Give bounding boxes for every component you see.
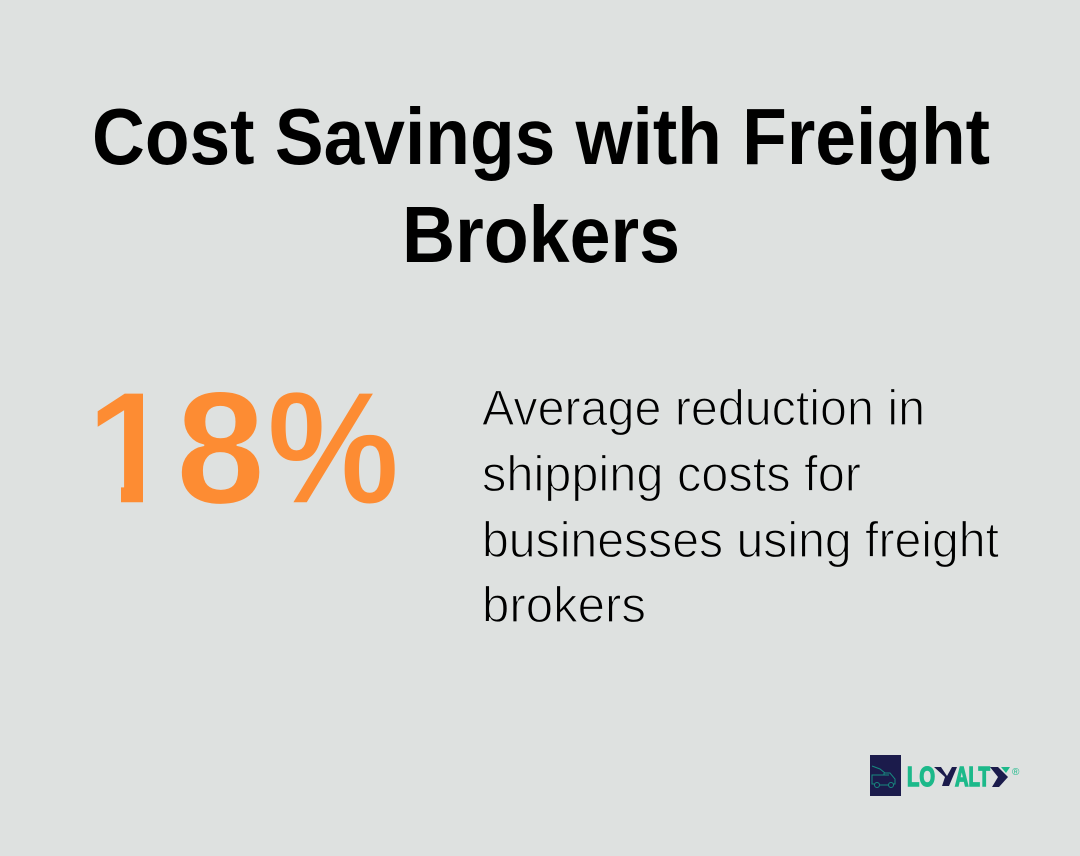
icon: truck on navy square — [870, 755, 901, 796]
wordmark — [907, 761, 990, 792]
title: Cost Savings with Freight — [92, 92, 990, 181]
wordmark: LO — [907, 761, 935, 792]
wordmark: ALT — [955, 761, 990, 792]
description text: Average reduction in — [482, 380, 925, 436]
wordmark chevrons — [934, 767, 957, 786]
description text — [482, 380, 999, 633]
registered mark: ® — [1012, 767, 1020, 778]
statistic: 18%: % — [267, 358, 399, 537]
title — [92, 92, 990, 279]
description text: businesses using freight — [482, 512, 999, 568]
statistic: 18% — [80, 358, 399, 537]
title: Brokers — [402, 190, 680, 279]
logo — [870, 755, 1020, 796]
statistic: 18%: 18 — [86, 358, 265, 537]
description text: brokers — [482, 577, 646, 633]
description text: shipping costs for — [482, 446, 861, 502]
